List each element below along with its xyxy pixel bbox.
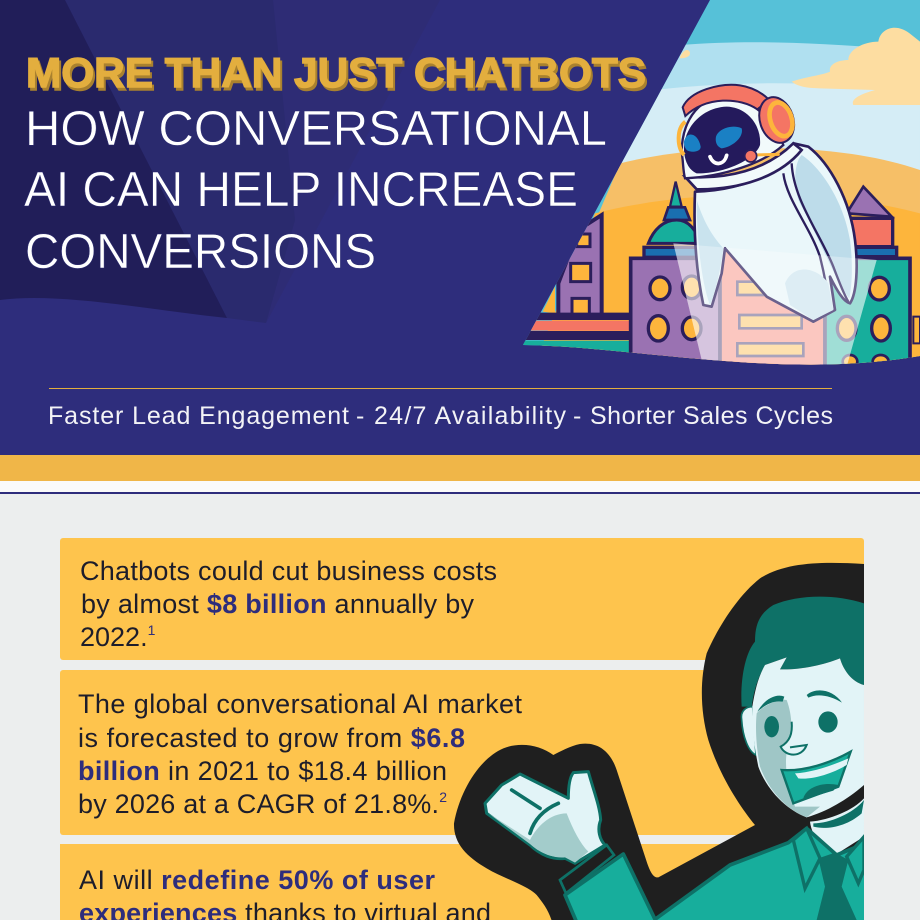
hills <box>533 148 920 367</box>
eyes <box>757 690 842 737</box>
subtitle: 24/7 Availability <box>374 402 566 430</box>
left tower <box>558 215 602 317</box>
neck <box>810 798 864 855</box>
card: business costs: 2022. <box>80 622 148 652</box>
title line: conversions: CONVERSIONS <box>25 225 376 279</box>
peach cloud <box>792 28 920 105</box>
card: business costs: 1 <box>148 622 156 638</box>
illustration: robot above a city <box>500 0 920 380</box>
card: market forecast: The global conversational AI market <box>78 689 522 719</box>
hair <box>741 597 864 707</box>
subtitle <box>48 402 833 430</box>
illustration: smiling man presenting <box>454 563 873 920</box>
hand <box>485 772 605 863</box>
mouth <box>782 752 851 803</box>
dome building <box>670 182 682 207</box>
card: user experiences <box>60 844 864 920</box>
subtitle: - <box>573 402 581 430</box>
face <box>752 657 864 817</box>
subtitle: Faster Lead Engagement <box>48 402 349 430</box>
sky <box>500 0 920 380</box>
face shadow <box>756 700 820 817</box>
right building <box>847 187 892 217</box>
card: market forecast: by 2026 at a CAGR of 21.8%. <box>78 789 439 819</box>
card: business costs <box>60 538 864 660</box>
robot body <box>695 143 857 322</box>
jacket <box>565 828 873 920</box>
cuff <box>560 845 614 893</box>
tractor beam <box>673 243 877 367</box>
title: MORE THAN JUST CHATBOTS <box>26 49 646 96</box>
header panel <box>0 0 920 455</box>
beam haze over robot <box>673 243 877 367</box>
card: market forecast <box>60 670 864 835</box>
white strip with navy rule <box>0 481 920 494</box>
tie <box>817 853 857 920</box>
card: market forecast: billion in 2021 to $18.4 billion <box>78 756 447 786</box>
card: user experiences: AI will redefine 50% of user <box>79 865 435 895</box>
black outline <box>454 563 864 920</box>
robot head <box>682 97 783 178</box>
cloud bands <box>659 42 860 94</box>
subtitle: Shorter Sales Cycles <box>590 402 833 430</box>
gold band <box>0 455 920 481</box>
gold divider <box>49 388 832 389</box>
robot collar <box>685 143 802 189</box>
subtitle: - <box>356 402 364 430</box>
title <box>24 49 648 279</box>
title line: gold highlight: MORE THAN JUST CHATBOTS <box>28 52 648 99</box>
card: market forecast: is forecasted to grow from $6.8 <box>78 723 465 753</box>
ear <box>741 707 756 755</box>
card: business costs: by almost $8 billion annually by <box>81 589 474 619</box>
title line: AI can help increase: AI CAN HELP INCREASE <box>24 163 578 217</box>
card: market forecast: 2 <box>439 789 447 805</box>
collar <box>793 828 864 888</box>
title line: how conversational: HOW CONVERSATIONAL <box>25 102 607 156</box>
headset <box>683 85 769 116</box>
card: business costs: Chatbots could cut business costs <box>80 556 497 586</box>
nose <box>781 722 807 755</box>
road stripes <box>535 313 633 320</box>
pink building <box>720 247 825 367</box>
